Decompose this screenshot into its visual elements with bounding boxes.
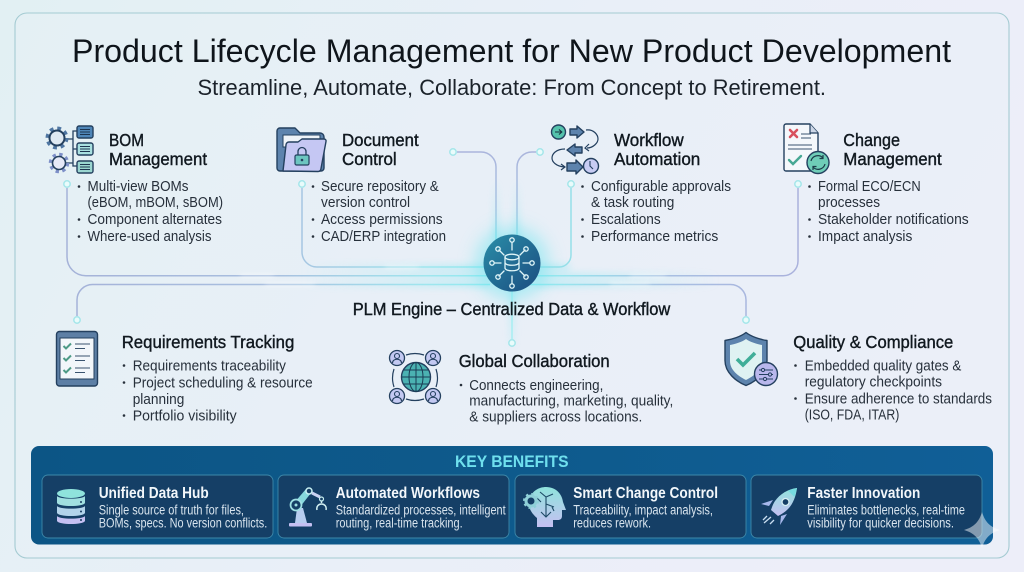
heading	[843, 130, 942, 169]
bullet list: Formal ECO/ECN	[818, 179, 921, 195]
icon: brain head with gear	[524, 487, 566, 527]
bullet list: (eBOM, mBOM, sBOM)	[88, 195, 223, 211]
bullet list: Escalations	[591, 212, 661, 228]
icon: locked folder	[277, 128, 326, 172]
bullet list: Where-used analysis	[88, 229, 212, 245]
heading: Automation	[614, 149, 700, 169]
panel: BOM Management	[48, 126, 223, 245]
card: Automated Workflows	[278, 475, 509, 538]
bullet list: Stakeholder notifications	[818, 212, 969, 228]
connector network to PLM engine	[64, 149, 801, 346]
card: Automated Workflows: Standardized processes, intelligent	[336, 502, 506, 518]
bullet list: Secure repository &	[321, 179, 439, 195]
bullet list: Portfolio visibility	[133, 408, 237, 424]
heading: BOM	[109, 130, 144, 150]
heading: Management	[109, 149, 207, 169]
bullet list	[312, 179, 446, 245]
bullet list: Requirements traceability	[133, 358, 287, 374]
bullet list	[808, 179, 969, 245]
card: Faster Innovation: Eliminates bottlenecks, real-time	[807, 502, 965, 518]
panel: Key Benefits	[31, 446, 993, 544]
bullet list: Impact analysis	[818, 229, 912, 245]
heading: Management	[843, 149, 942, 169]
heading	[342, 130, 419, 169]
heading: Change	[843, 130, 900, 150]
bullet list: & task routing	[591, 195, 674, 211]
heading	[109, 130, 207, 169]
bullet list: Configurable approvals	[591, 179, 731, 195]
card: Faster Innovation	[751, 475, 982, 538]
icon: checklist tablet	[56, 332, 98, 386]
title: Product Lifecycle Management for New Product Development	[72, 33, 951, 69]
heading: Workflow	[614, 130, 684, 150]
icon: gears and BOM lists	[48, 126, 93, 173]
card: Unified Data Hub: Unified Data Hub	[99, 485, 209, 502]
bullet list	[123, 358, 313, 424]
icon: shield with check	[725, 332, 778, 386]
card: Unified Data Hub: Single source of truth for files,	[99, 502, 244, 518]
description: manufacturing, marketing, quality,	[469, 394, 673, 410]
heading: Key Benefits: KEY BENEFITS	[455, 452, 568, 471]
heading: Global Collaboration	[459, 351, 610, 371]
bullet list	[794, 358, 992, 424]
bullet list: processes	[818, 195, 880, 211]
description: & suppliers across locations.	[469, 410, 642, 426]
icon: robot arm	[289, 488, 326, 526]
icon: globe and people	[390, 350, 440, 404]
card: Automated Workflows: Automated Workflows	[336, 485, 480, 502]
panel: Change Management	[784, 124, 969, 245]
icon: database	[57, 489, 85, 524]
icon: workflow arrows and clock	[552, 125, 598, 174]
heading	[614, 130, 700, 169]
bullet list: Component alternates	[88, 212, 222, 228]
bullet list: version control	[321, 195, 410, 211]
card: Automated Workflows: routing, real-time tracking.	[336, 516, 463, 530]
icon: sparkle watermark	[964, 512, 1000, 548]
panel: Requirements Tracking	[56, 332, 313, 424]
subtitle: Streamline, Automate, Collaborate: From Concept to Retirement.	[198, 75, 826, 100]
panel: Global Collaboration	[390, 350, 673, 426]
PLM engine label: PLM Engine – Centralized Data & Workflow	[353, 299, 671, 319]
card: Faster Innovation: Faster Innovation	[807, 485, 920, 502]
bullet list: Embedded quality gates &	[805, 358, 962, 374]
PLM engine hub icon	[476, 227, 548, 299]
bullet list: Project scheduling & resource	[133, 376, 313, 392]
bullet list	[581, 179, 731, 245]
heading: Quality & Compliance	[793, 332, 953, 352]
icon: change document	[784, 124, 829, 174]
description: Connects engineering,	[469, 378, 603, 394]
card: Faster Innovation: visibility for quicker decisions.	[807, 516, 954, 530]
card: Unified Data Hub: BOMs, specs. No version conflicts.	[99, 516, 267, 530]
heading: Control	[342, 149, 397, 169]
panel: Document Control	[277, 128, 446, 245]
card: Smart Change Control: Smart Change Control	[573, 485, 718, 502]
card: Unified Data Hub	[42, 475, 273, 538]
card: Smart Change Control: Traceability, impact analysis,	[573, 502, 713, 518]
heading: Document	[342, 130, 419, 150]
bullet list	[78, 179, 223, 245]
bullet list: Ensure adherence to standards	[805, 392, 992, 408]
panel: Workflow Automation	[552, 125, 731, 245]
bullet list: planning	[133, 392, 184, 408]
bullet list: Access permissions	[321, 212, 443, 228]
bullet list: Performance metrics	[591, 229, 718, 245]
bullet list: (ISO, FDA, ITAR)	[805, 408, 899, 424]
bullet list: Multi-view BOMs	[88, 179, 188, 195]
panel: Quality & Compliance	[725, 332, 992, 424]
heading: Requirements Tracking	[122, 332, 294, 352]
bullet list: regulatory checkpoints	[805, 374, 942, 390]
description	[460, 378, 673, 426]
bullet list: CAD/ERP integration	[321, 229, 446, 245]
card: Smart Change Control: reduces rework.	[573, 516, 651, 530]
icon: rocket	[761, 488, 797, 525]
card: Smart Change Control	[515, 475, 746, 538]
